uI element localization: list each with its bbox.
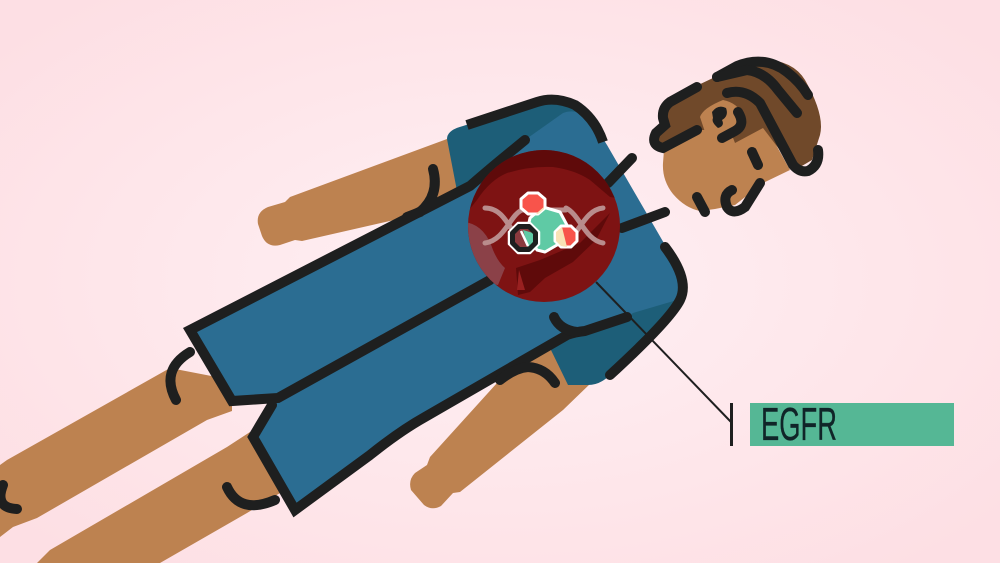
ear (700, 100, 742, 140)
label: EGFR: EGFR (761, 398, 837, 450)
DNA strands (485, 208, 603, 243)
molecule red right (555, 226, 577, 247)
label: EGFR (750, 398, 954, 450)
molecule ring hole edge (521, 231, 528, 246)
hair (655, 59, 821, 170)
shirt and shorts (190, 111, 682, 510)
molecule red top (521, 193, 545, 214)
molecule black ring (512, 226, 536, 250)
lower sleeve (550, 300, 677, 385)
lower arm (410, 345, 592, 508)
light lower left area (465, 222, 505, 285)
bright streak (517, 270, 525, 290)
dark shadow shape (516, 213, 610, 295)
face details (654, 87, 697, 148)
upper sleeve (447, 100, 590, 191)
molecule ring hole green (523, 230, 533, 247)
lower leg (37, 432, 285, 563)
neck and head (663, 120, 790, 211)
figure: person lying diagonally (0, 59, 821, 563)
inner ear (712, 107, 727, 128)
outlines (0, 62, 818, 510)
upper leg (0, 368, 232, 537)
molecule red top cream corner (536, 207, 544, 214)
molecule cream spot (556, 227, 567, 247)
dark upper band (470, 150, 614, 208)
molecule ring backing (509, 223, 539, 253)
molecule green body (527, 207, 572, 252)
magnified circle (468, 150, 620, 302)
upper arm (258, 139, 470, 246)
leader line (596, 282, 731, 422)
leader tick (730, 403, 733, 446)
